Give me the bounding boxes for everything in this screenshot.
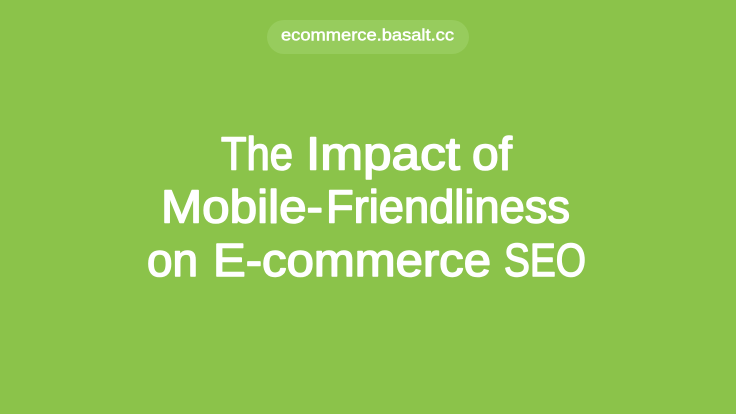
title: The — [221, 128, 293, 180]
source badge — [267, 20, 469, 54]
title: of — [472, 128, 512, 180]
title: E-commerce — [213, 234, 491, 286]
title: Mobile- — [161, 180, 323, 232]
title: Impact — [306, 128, 460, 180]
title — [147, 128, 586, 286]
source badge: ecommerce.basalt.cc — [281, 26, 455, 44]
title: on — [147, 234, 198, 286]
title: SEO — [504, 234, 586, 286]
title: Friendliness — [326, 180, 570, 232]
